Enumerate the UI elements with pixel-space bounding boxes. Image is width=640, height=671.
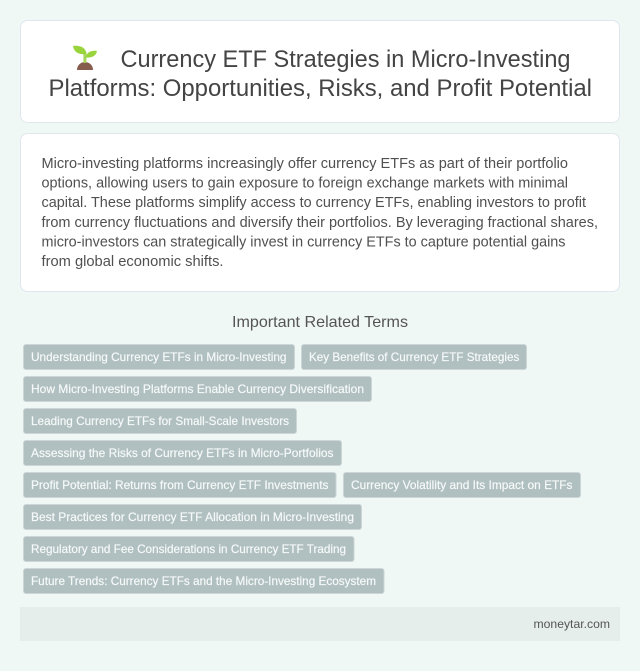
title: Currency ETF Strategies in Micro-Investing <box>120 46 570 73</box>
tag: future trends <box>24 568 384 594</box>
tag: leading ETFs: Leading Currency ETFs for Small-Scale Investors <box>31 414 289 428</box>
intro paragraph: capital. These platforms simplify access to currency ETFs, enabling investors to profit <box>42 195 586 211</box>
title: Platforms: Opportunities, Risks, and Profit Potential <box>48 75 592 102</box>
intro paragraph: from global economic shifts. <box>42 254 224 270</box>
icon: seedling <box>73 46 97 70</box>
heading: important related terms: Important Related Terms <box>232 314 408 331</box>
panel: title card <box>20 20 620 122</box>
panel: related term tags <box>24 344 580 594</box>
tag: best practices <box>24 504 362 530</box>
tag: leading ETFs <box>24 408 296 434</box>
footer <box>20 607 620 641</box>
tag: profit potential <box>24 472 336 498</box>
intro paragraph <box>42 156 598 270</box>
tag: risks <box>24 440 342 466</box>
tag: volatility: Currency Volatility and Its Impact on ETFs <box>351 478 572 492</box>
tag: diversification: How Micro-Investing Platforms Enable Currency Diversification <box>31 382 364 396</box>
tag: understanding <box>24 344 294 370</box>
tag: best practices: Best Practices for Currency ETF Allocation in Micro-Investing <box>31 510 354 524</box>
panel: introduction <box>20 134 620 292</box>
intro paragraph: from currency fluctuations and diversify their portfolios. By leveraging fractional shares, <box>42 215 598 231</box>
tag: regulatory: Regulatory and Fee Considerations in Currency ETF Trading <box>31 542 346 556</box>
tag: future trends: Future Trends: Currency ETFs and the Micro-Investing Ecosystem <box>31 574 376 588</box>
footer site name: moneytar.com <box>534 617 610 631</box>
tag: profit potential: Profit Potential: Returns from Currency ETF Investments <box>31 478 328 492</box>
tag: key benefits: Key Benefits of Currency ETF Strategies <box>309 350 519 364</box>
tag: risks: Assessing the Risks of Currency ETFs in Micro-Portfolios <box>31 446 334 460</box>
title <box>48 46 592 102</box>
intro paragraph: options, allowing users to gain exposure to foreign exchange markets with minimal <box>42 176 568 192</box>
intro paragraph: micro-investors can strategically invest in currency ETFs to capture potential gains <box>42 234 566 250</box>
tag: understanding: Understanding Currency ETFs in Micro-Investing <box>31 350 286 364</box>
tag: diversification <box>24 376 372 402</box>
tag: key benefits <box>302 344 526 370</box>
tag: regulatory <box>24 536 354 562</box>
intro paragraph: Micro-investing platforms increasingly offer currency ETFs as part of their portfolio <box>42 156 568 172</box>
tag: volatility <box>344 472 580 498</box>
